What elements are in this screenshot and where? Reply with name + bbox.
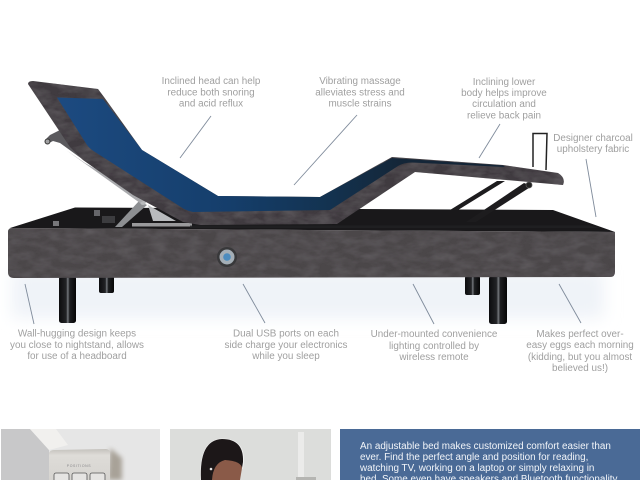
- callout: inclining lower body: circulation and: [472, 99, 536, 110]
- base interior: [10, 208, 615, 232]
- callout: wall-hugging design: Wall-hugging design keeps: [18, 328, 136, 340]
- head strut and hinge: [45, 130, 148, 203]
- callout: inclining lower body: [461, 77, 547, 158]
- bed legs: [59, 276, 507, 324]
- text panel: adjustable bed intro: An adjustable bed makes customized comfort easier than: [360, 441, 611, 452]
- callout: inclined head: Inclined head can help: [162, 76, 261, 87]
- callout: vibrating massage: muscle strains: [328, 98, 392, 110]
- callout: inclined head: and acid reflux: [179, 98, 243, 110]
- callout: dual USB ports: side charge your electronics: [225, 340, 348, 351]
- callout: charcoal fabric: Designer charcoal: [553, 133, 633, 144]
- callout: over-easy eggs: believed us!): [552, 363, 608, 374]
- callout: wall-hugging design: you close to nightstand, allows: [10, 340, 144, 351]
- photo: wireless remote: POSITIONS: [67, 464, 91, 468]
- text panel: adjustable bed intro: watching TV, working on a laptop or simply relaxing in: [359, 463, 594, 474]
- callout: dual USB ports: Dual USB ports on each: [233, 328, 339, 340]
- callout: wall-hugging design: for use of a headboard: [27, 351, 127, 362]
- callout: dual USB ports: while you sleep: [251, 351, 320, 362]
- callout: dual USB ports: [225, 284, 348, 362]
- callout: inclining lower body: relieve back pain: [467, 110, 541, 122]
- illustration: adjustable bed: [8, 81, 615, 324]
- callout: vibrating massage: Vibrating massage: [319, 76, 401, 87]
- blue mattress panel: [57, 98, 505, 212]
- callout: charcoal fabric: upholstery fabric: [557, 144, 629, 155]
- mattress frame upholstery: [28, 81, 564, 225]
- floor glow under bed: [12, 270, 604, 318]
- callout: inclining lower body: body helps improve: [461, 88, 547, 99]
- callout: over-easy eggs: Makes perfect over-: [536, 329, 624, 340]
- callout: inclined head: reduce both snoring: [167, 88, 255, 98]
- callout: over-easy eggs: [526, 284, 634, 374]
- callout: over-easy eggs: (kidding, but you almost: [528, 352, 632, 363]
- callout: under-mounted lighting: [371, 284, 498, 363]
- photo: woman in bed: [170, 429, 331, 480]
- base upholstery: [8, 228, 615, 278]
- foot bracket: [533, 134, 547, 170]
- callout: vibrating massage: [294, 76, 405, 185]
- callout: inclining lower body: Inclining lower: [473, 77, 536, 88]
- callout: wall-hugging design: [10, 284, 144, 362]
- callout: under-mounted lighting: Under-mounted convenience: [371, 329, 498, 340]
- callout: vibrating massage: alleviates stress and: [315, 88, 405, 98]
- USB port button: [217, 247, 237, 267]
- callout: charcoal fabric: [553, 133, 633, 217]
- callout: over-easy eggs: easy eggs each morning: [526, 340, 634, 351]
- text panel: adjustable bed intro: [340, 429, 640, 480]
- callout: under-mounted lighting: wireless remote: [398, 352, 469, 363]
- photo: wireless remote: [1, 429, 160, 480]
- text panel: adjustable bed intro: ever. Find the perfect angle and position for reading,: [360, 452, 588, 463]
- callout: under-mounted lighting: lighting controlled by: [389, 341, 479, 352]
- callout: inclined head: [162, 76, 261, 158]
- lift arms: [115, 181, 532, 227]
